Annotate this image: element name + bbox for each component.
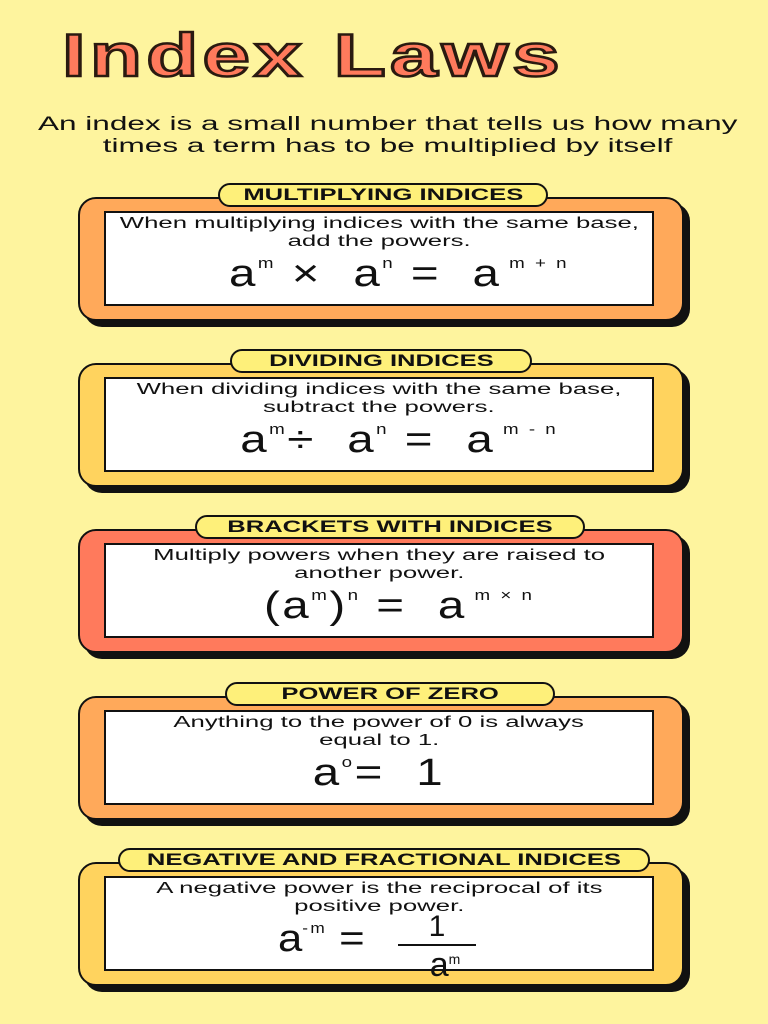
label pill: [218, 183, 548, 207]
subtitle: An index is a small number that tells us how many: [38, 114, 738, 135]
white box: [104, 377, 654, 472]
fraction: am: [430, 946, 460, 984]
panel: dividing: [78, 349, 690, 493]
subtitle: times a term has to be multiplied by itself: [103, 136, 673, 157]
panel: negative: [78, 848, 690, 992]
panel: multiplying: [78, 183, 690, 327]
white box: A negative power is the reciprocal of its: [156, 880, 602, 897]
white box: When multiplying indices with the same base,: [119, 215, 639, 232]
white box: Anything to the power of 0 is always: [174, 714, 584, 731]
label pill: [195, 515, 585, 539]
panel: power of zero: [78, 682, 690, 826]
white box: Multiply powers when they are raised to: [153, 547, 605, 564]
white box: [104, 211, 654, 306]
white box: another power.: [294, 565, 464, 582]
fraction: 1: [429, 910, 445, 943]
subtitle: [38, 114, 738, 157]
white box: [104, 710, 654, 805]
equation: ao= 1: [313, 752, 445, 794]
label pill: [225, 682, 555, 706]
fraction: [398, 910, 476, 984]
white box: subtract the powers.: [263, 399, 495, 416]
panel: brackets: [78, 515, 690, 659]
white box: add the powers.: [287, 233, 471, 250]
white box: equal to 1.: [319, 732, 439, 749]
label pill: POWER OF ZERO: [281, 685, 499, 703]
equation: a-m =: [278, 918, 365, 960]
equation: am÷ an = a m - n: [240, 419, 558, 461]
white box: When dividing indices with the same base,: [137, 381, 621, 398]
label pill: BRACKETS WITH INDICES: [227, 518, 553, 536]
label pill: DIVIDING INDICES: [269, 352, 493, 370]
white box: positive power.: [294, 898, 464, 915]
label pill: [230, 349, 532, 373]
white box: [104, 543, 654, 638]
white box: [104, 876, 654, 971]
label pill: MULTIPLYING INDICES: [243, 186, 523, 204]
title: Index Laws: [62, 22, 564, 89]
label pill: [118, 848, 650, 872]
equation: am × an = a m + n: [229, 253, 569, 295]
label pill: NEGATIVE AND FRACTIONAL INDICES: [147, 851, 621, 869]
equation: (am)n = a m × n: [264, 585, 534, 627]
